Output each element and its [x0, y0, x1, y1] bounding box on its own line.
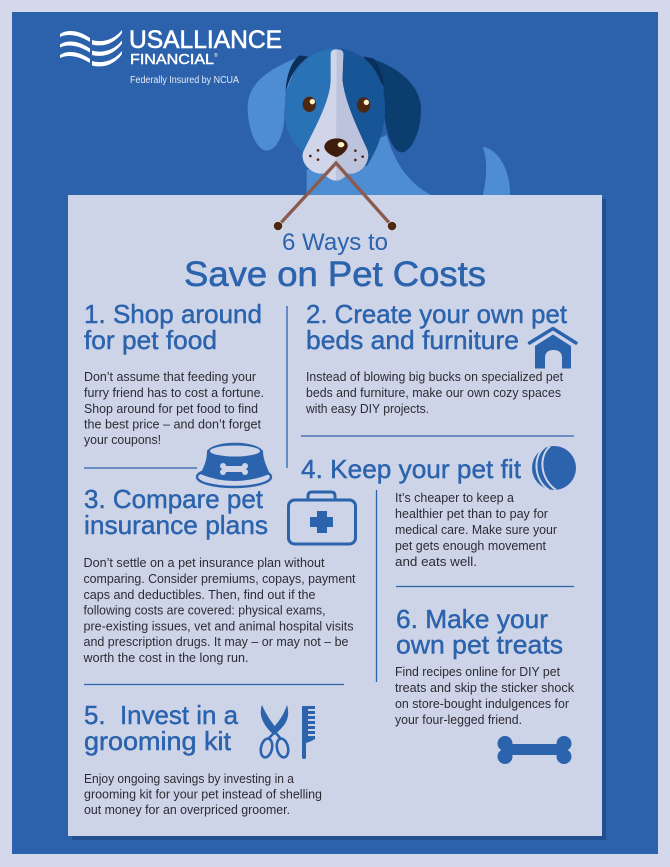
text block 1: Don’t assume that feeding your	[84, 369, 257, 384]
text block 3	[83, 555, 356, 665]
heading 3: 3. Compare pet	[84, 484, 264, 514]
heading 5	[84, 700, 239, 756]
text block 3: caps and deductibles. Then, find out if the	[84, 587, 316, 602]
text block 4: pet gets enough movement	[395, 538, 546, 553]
text block 6: on store-bought indulgences for	[395, 696, 570, 711]
panel: tip 5	[84, 700, 322, 817]
dog body	[307, 135, 432, 196]
heading 6: own pet treats	[396, 630, 563, 660]
main content panel	[68, 195, 602, 836]
dog left ear	[248, 57, 300, 151]
dog whisker dots	[309, 149, 364, 161]
text block 5: grooming kit for your pet instead of shelling	[84, 786, 322, 802]
heading 4: 4. Keep your pet fit	[301, 454, 522, 484]
panel shadow	[72, 199, 606, 840]
heading 3	[84, 484, 268, 540]
logo registered mark: ®	[214, 52, 218, 59]
text block 6: Find recipes online for DIY pet	[395, 664, 560, 679]
dog left eye	[303, 97, 316, 112]
text block 1: your coupons!	[84, 432, 161, 447]
icon: dog bowl	[197, 443, 271, 487]
text block 3: worth the cost in the long run.	[83, 650, 248, 665]
panel: tip 3	[83, 484, 356, 665]
icon: ball	[532, 446, 576, 490]
illustration: dog	[248, 48, 510, 196]
text block 5: Enjoy ongoing savings by investing in a	[84, 771, 295, 786]
text block 6	[395, 664, 574, 727]
heading 5: grooming kit	[84, 726, 232, 756]
dog tail	[483, 147, 510, 196]
text block 3: following costs are covered: physical exams,	[84, 602, 326, 618]
icon: comb	[302, 706, 315, 759]
heading 2: 2. Create your own pet	[306, 299, 568, 329]
text block 4: medical care. Make sure your	[395, 522, 558, 537]
text block 1: furry friend has to cost a fortune.	[84, 385, 264, 400]
icon: dog house	[530, 328, 576, 368]
heading 1: for pet food	[84, 325, 217, 355]
panel: tip 1	[84, 299, 264, 447]
text block 4: It’s cheaper to keep a	[395, 490, 515, 505]
panel: tip 6	[395, 604, 574, 727]
text block 6: your four-legged friend.	[395, 712, 522, 727]
dog right eye	[357, 97, 370, 113]
heading 5: 5. Invest in a	[84, 700, 239, 730]
heading 2: beds and furniture	[306, 325, 519, 355]
text block 4: and eats well.	[395, 554, 477, 569]
icon: scissors	[259, 705, 290, 758]
panel: tip 4	[301, 446, 576, 569]
text block 5	[84, 771, 322, 817]
title	[184, 229, 486, 294]
text block 1	[84, 369, 264, 447]
dog inner ear right	[363, 57, 384, 87]
text block 3: and prescription drugs. It may – or may not – be	[84, 634, 348, 649]
bone on bowl	[220, 463, 248, 475]
dog head right	[337, 48, 385, 166]
text block 4: healthier pet than to pay for	[395, 506, 549, 521]
heading 6: 6. Make your	[396, 604, 548, 634]
text block 2: beds and furniture, make our own cozy spaces	[306, 385, 561, 400]
text block 1: the best price – and don’t forget	[84, 416, 261, 432]
text block 5: out money for an overpriced groomer.	[84, 802, 290, 817]
heading 2	[306, 299, 568, 355]
text block 3: Don’t settle on a pet insurance plan without	[84, 555, 325, 570]
logo wordmark: USALLIANCE	[129, 26, 282, 54]
logo: USAlliance Financial	[60, 26, 282, 86]
icon: sign hanging stick	[273, 163, 397, 231]
dog right ear	[363, 57, 421, 152]
text block 3: comparing. Consider premiums, copays, payment	[84, 571, 356, 586]
dog nose	[324, 138, 348, 157]
heading 6	[396, 604, 563, 660]
text block 6: treats and skip the sticker shock	[395, 680, 574, 695]
text block 2: with easy DIY projects.	[305, 401, 429, 416]
dog inner ear left	[286, 55, 308, 93]
heading 1	[84, 299, 262, 355]
dividers	[84, 306, 574, 684]
icon: logo waves	[60, 30, 122, 66]
icon: bone	[498, 736, 572, 764]
title line 1: 6 Ways to	[282, 229, 388, 256]
dog muzzle and blaze	[303, 49, 368, 181]
logo tagline: Federally Insured by NCUA	[130, 75, 239, 86]
text block 1: Shop around for pet food to find	[84, 401, 258, 416]
logo subtitle: FINANCIAL	[130, 51, 214, 68]
dog head left	[285, 48, 337, 162]
text block 2: Instead of blowing big bucks on specialized pet	[306, 369, 563, 384]
text block 2	[305, 369, 563, 416]
text block 3: pre-existing issues, vet and animal hospital visits	[84, 618, 354, 634]
panel: tip 2	[305, 299, 576, 416]
heading 1: 1. Shop around	[84, 299, 262, 329]
heading 3: insurance plans	[84, 510, 268, 540]
text block 4	[395, 490, 558, 569]
icon: first aid kit	[288, 492, 356, 544]
title line 2: Save on Pet Costs	[184, 255, 486, 294]
